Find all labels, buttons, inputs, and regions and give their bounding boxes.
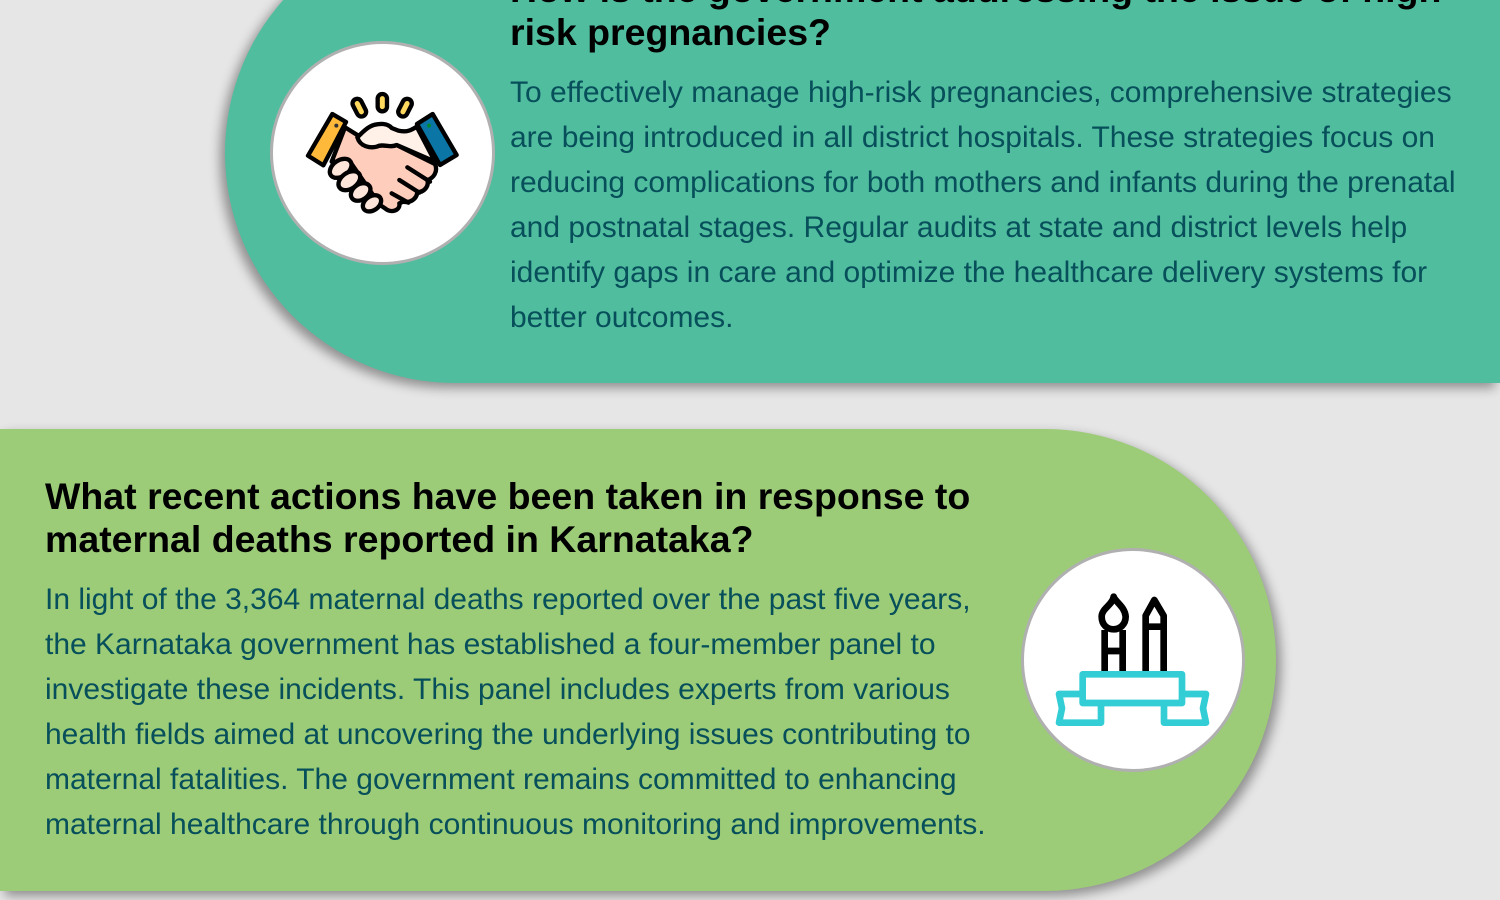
text block: high-risk pregnancy strategies	[510, 76, 1456, 334]
icon circle: handshake	[270, 41, 495, 265]
text block: high-risk pregnancy strategies: and postnatal stages. Regular audits at state and district levels help	[510, 211, 1407, 244]
text block: Karnataka four-member panel: maternal healthcare through continuous monitoring and improvements.	[45, 808, 986, 841]
text block: Karnataka four-member panel: maternal fatalities. The government remains committed to enhancing	[45, 763, 957, 796]
text block: Karnataka four-member panel: In light of the 3,364 maternal deaths reported over the past five years,	[45, 583, 971, 616]
text block: Karnataka four-member panel: investigate these incidents. This panel includes experts from various	[45, 673, 950, 706]
text block: Karnataka four-member panel: health fields aimed at uncovering the underlying issues contributing to	[45, 718, 971, 751]
text block: high-risk pregnancy strategies: better outcomes.	[510, 301, 733, 334]
panel: recent actions in Karnataka	[0, 429, 1276, 891]
heading: recent actions question	[45, 475, 970, 560]
heading: recent actions question: What recent actions have been taken in response to	[45, 475, 970, 517]
heading: high-risk pregnancies question	[510, 0, 1454, 53]
text block: high-risk pregnancy strategies: To effectively manage high-risk pregnancies, comprehensive strategies	[510, 76, 1452, 109]
icon circle: brushes	[1021, 548, 1245, 772]
heading: recent actions question: maternal deaths reported in Karnataka?	[45, 518, 754, 560]
heading: high-risk pregnancies question: risk pregnancies?	[510, 11, 831, 53]
panel: government response to high-risk pregnancies	[225, 0, 1500, 383]
text block: high-risk pregnancy strategies: identify gaps in care and optimize the healthcare delivery systems for	[510, 256, 1427, 289]
text block: high-risk pregnancy strategies: are being introduced in all district hospitals. These strategies focus on	[510, 121, 1435, 154]
text block: Karnataka four-member panel: the Karnataka government has established a four-member panel to	[45, 628, 936, 661]
icon: handshake	[306, 92, 459, 214]
icon: paintbrushes with ribbon	[1056, 593, 1210, 726]
text block: high-risk pregnancy strategies: reducing complications for both mothers and infants during the prenatal	[510, 166, 1456, 199]
text block: Karnataka four-member panel	[45, 583, 986, 841]
